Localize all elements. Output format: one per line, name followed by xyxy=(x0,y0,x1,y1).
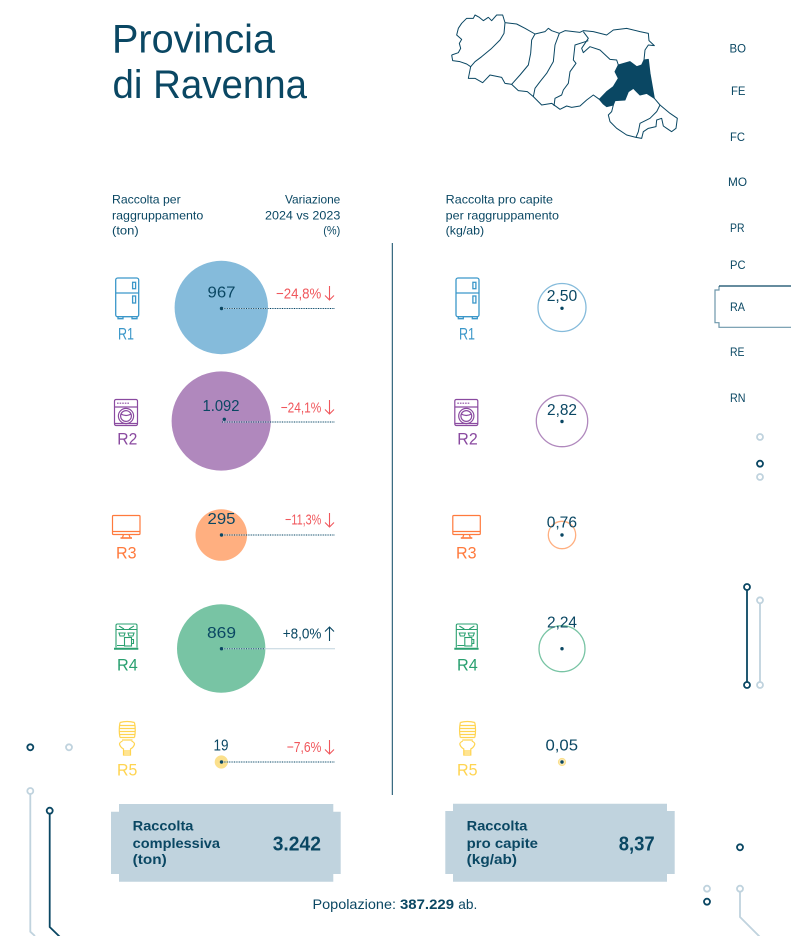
map: Emilia-Romagna provinces with Ravenna highlighted xyxy=(452,15,677,138)
title: Provincia xyxy=(112,17,276,61)
province navigation: RN xyxy=(730,391,746,405)
row R1 right: 2,50 xyxy=(547,288,577,305)
total box: raccolta complessiva xyxy=(111,804,341,882)
province navigation: FC xyxy=(730,130,745,144)
row R2 left: −24,1% xyxy=(281,399,321,416)
row R3 right xyxy=(453,515,577,562)
row R2 left xyxy=(114,371,335,471)
total box: raccolta pro capite xyxy=(445,804,675,882)
row R5 left: 19 xyxy=(214,738,229,755)
population note xyxy=(312,896,477,912)
right column heading: Raccolta pro capite xyxy=(446,192,553,206)
row R2 right: R2 xyxy=(457,430,478,448)
right column heading: (kg/ab) xyxy=(446,224,484,238)
row R3 right: 0,76 xyxy=(547,515,577,532)
row R3 left: 295 xyxy=(208,511,236,528)
right column heading xyxy=(446,192,559,238)
left column heading: Raccolta per xyxy=(112,192,181,206)
row R5 right xyxy=(457,722,578,779)
province navigation: RE xyxy=(730,345,744,359)
row R2 left: R2 xyxy=(117,430,137,448)
total box: raccolta complessiva: 3.242 xyxy=(273,834,321,856)
row R1 left: 967 xyxy=(208,285,236,302)
row R5 left: −7,6% xyxy=(287,739,321,756)
variation heading: Variazione xyxy=(285,192,341,206)
row R2 right: 2,82 xyxy=(547,402,577,419)
province navigation: PR xyxy=(730,221,745,235)
row R5 right: R5 xyxy=(457,761,478,779)
row R4 left: 869 xyxy=(207,625,236,642)
row R3 left: R3 xyxy=(116,544,136,562)
row R3 left: −11,3% xyxy=(285,512,321,529)
active tab: RA xyxy=(715,286,791,327)
title: di Ravenna xyxy=(112,63,308,107)
total box: raccolta complessiva: complessiva xyxy=(133,835,220,851)
total box: raccolta complessiva: (ton) xyxy=(133,851,167,867)
province navigation: FE xyxy=(731,84,746,98)
row R4 left: +8,0% xyxy=(283,626,321,643)
title xyxy=(112,17,308,107)
row R4 left xyxy=(114,604,335,693)
population note: ab. xyxy=(458,896,477,912)
province navigation: MO xyxy=(728,175,747,189)
variation heading: 2024 vs 2023 xyxy=(265,208,341,222)
row R3 right: R3 xyxy=(456,544,476,562)
column divider xyxy=(391,243,393,795)
total box: raccolta pro capite: 8,37 xyxy=(619,834,655,856)
population note: Popolazione: xyxy=(312,896,396,912)
total box: raccolta pro capite: pro capite xyxy=(467,835,538,851)
row R5 left: R5 xyxy=(117,761,137,779)
left column heading xyxy=(112,192,204,238)
right column heading: per raggruppamento xyxy=(446,208,559,222)
row R5 left xyxy=(117,722,335,779)
province navigation xyxy=(728,42,747,405)
row R1 left xyxy=(116,261,335,354)
total box: raccolta pro capite: Raccolta xyxy=(467,818,528,834)
row R4 right: R4 xyxy=(457,657,478,675)
left column heading: raggruppamento xyxy=(112,208,204,222)
variation heading xyxy=(265,192,341,238)
decorative circuit lines xyxy=(27,434,763,936)
row R2 right xyxy=(455,395,588,448)
row R4 right: 2,24 xyxy=(547,614,577,631)
total box: raccolta pro capite: (kg/ab) xyxy=(467,851,517,867)
total box: raccolta complessiva: Raccolta xyxy=(133,818,194,834)
row R1 right xyxy=(456,278,586,343)
population note: 387.229 xyxy=(400,896,454,912)
row R1 right: R1 xyxy=(459,325,475,343)
province navigation: BO xyxy=(730,42,746,56)
province navigation: RA xyxy=(730,300,745,314)
variation heading: (%) xyxy=(323,224,340,238)
row R4 right xyxy=(454,614,585,675)
row R1 left: −24,8% xyxy=(276,285,321,302)
row R1 left: R1 xyxy=(118,325,134,343)
row R3 left xyxy=(112,509,335,562)
row R4 left: R4 xyxy=(117,657,138,675)
province navigation: PC xyxy=(730,258,746,272)
row R2 left: 1.092 xyxy=(202,398,240,415)
left column heading: (ton) xyxy=(112,224,139,238)
row R5 right: 0,05 xyxy=(546,738,578,755)
